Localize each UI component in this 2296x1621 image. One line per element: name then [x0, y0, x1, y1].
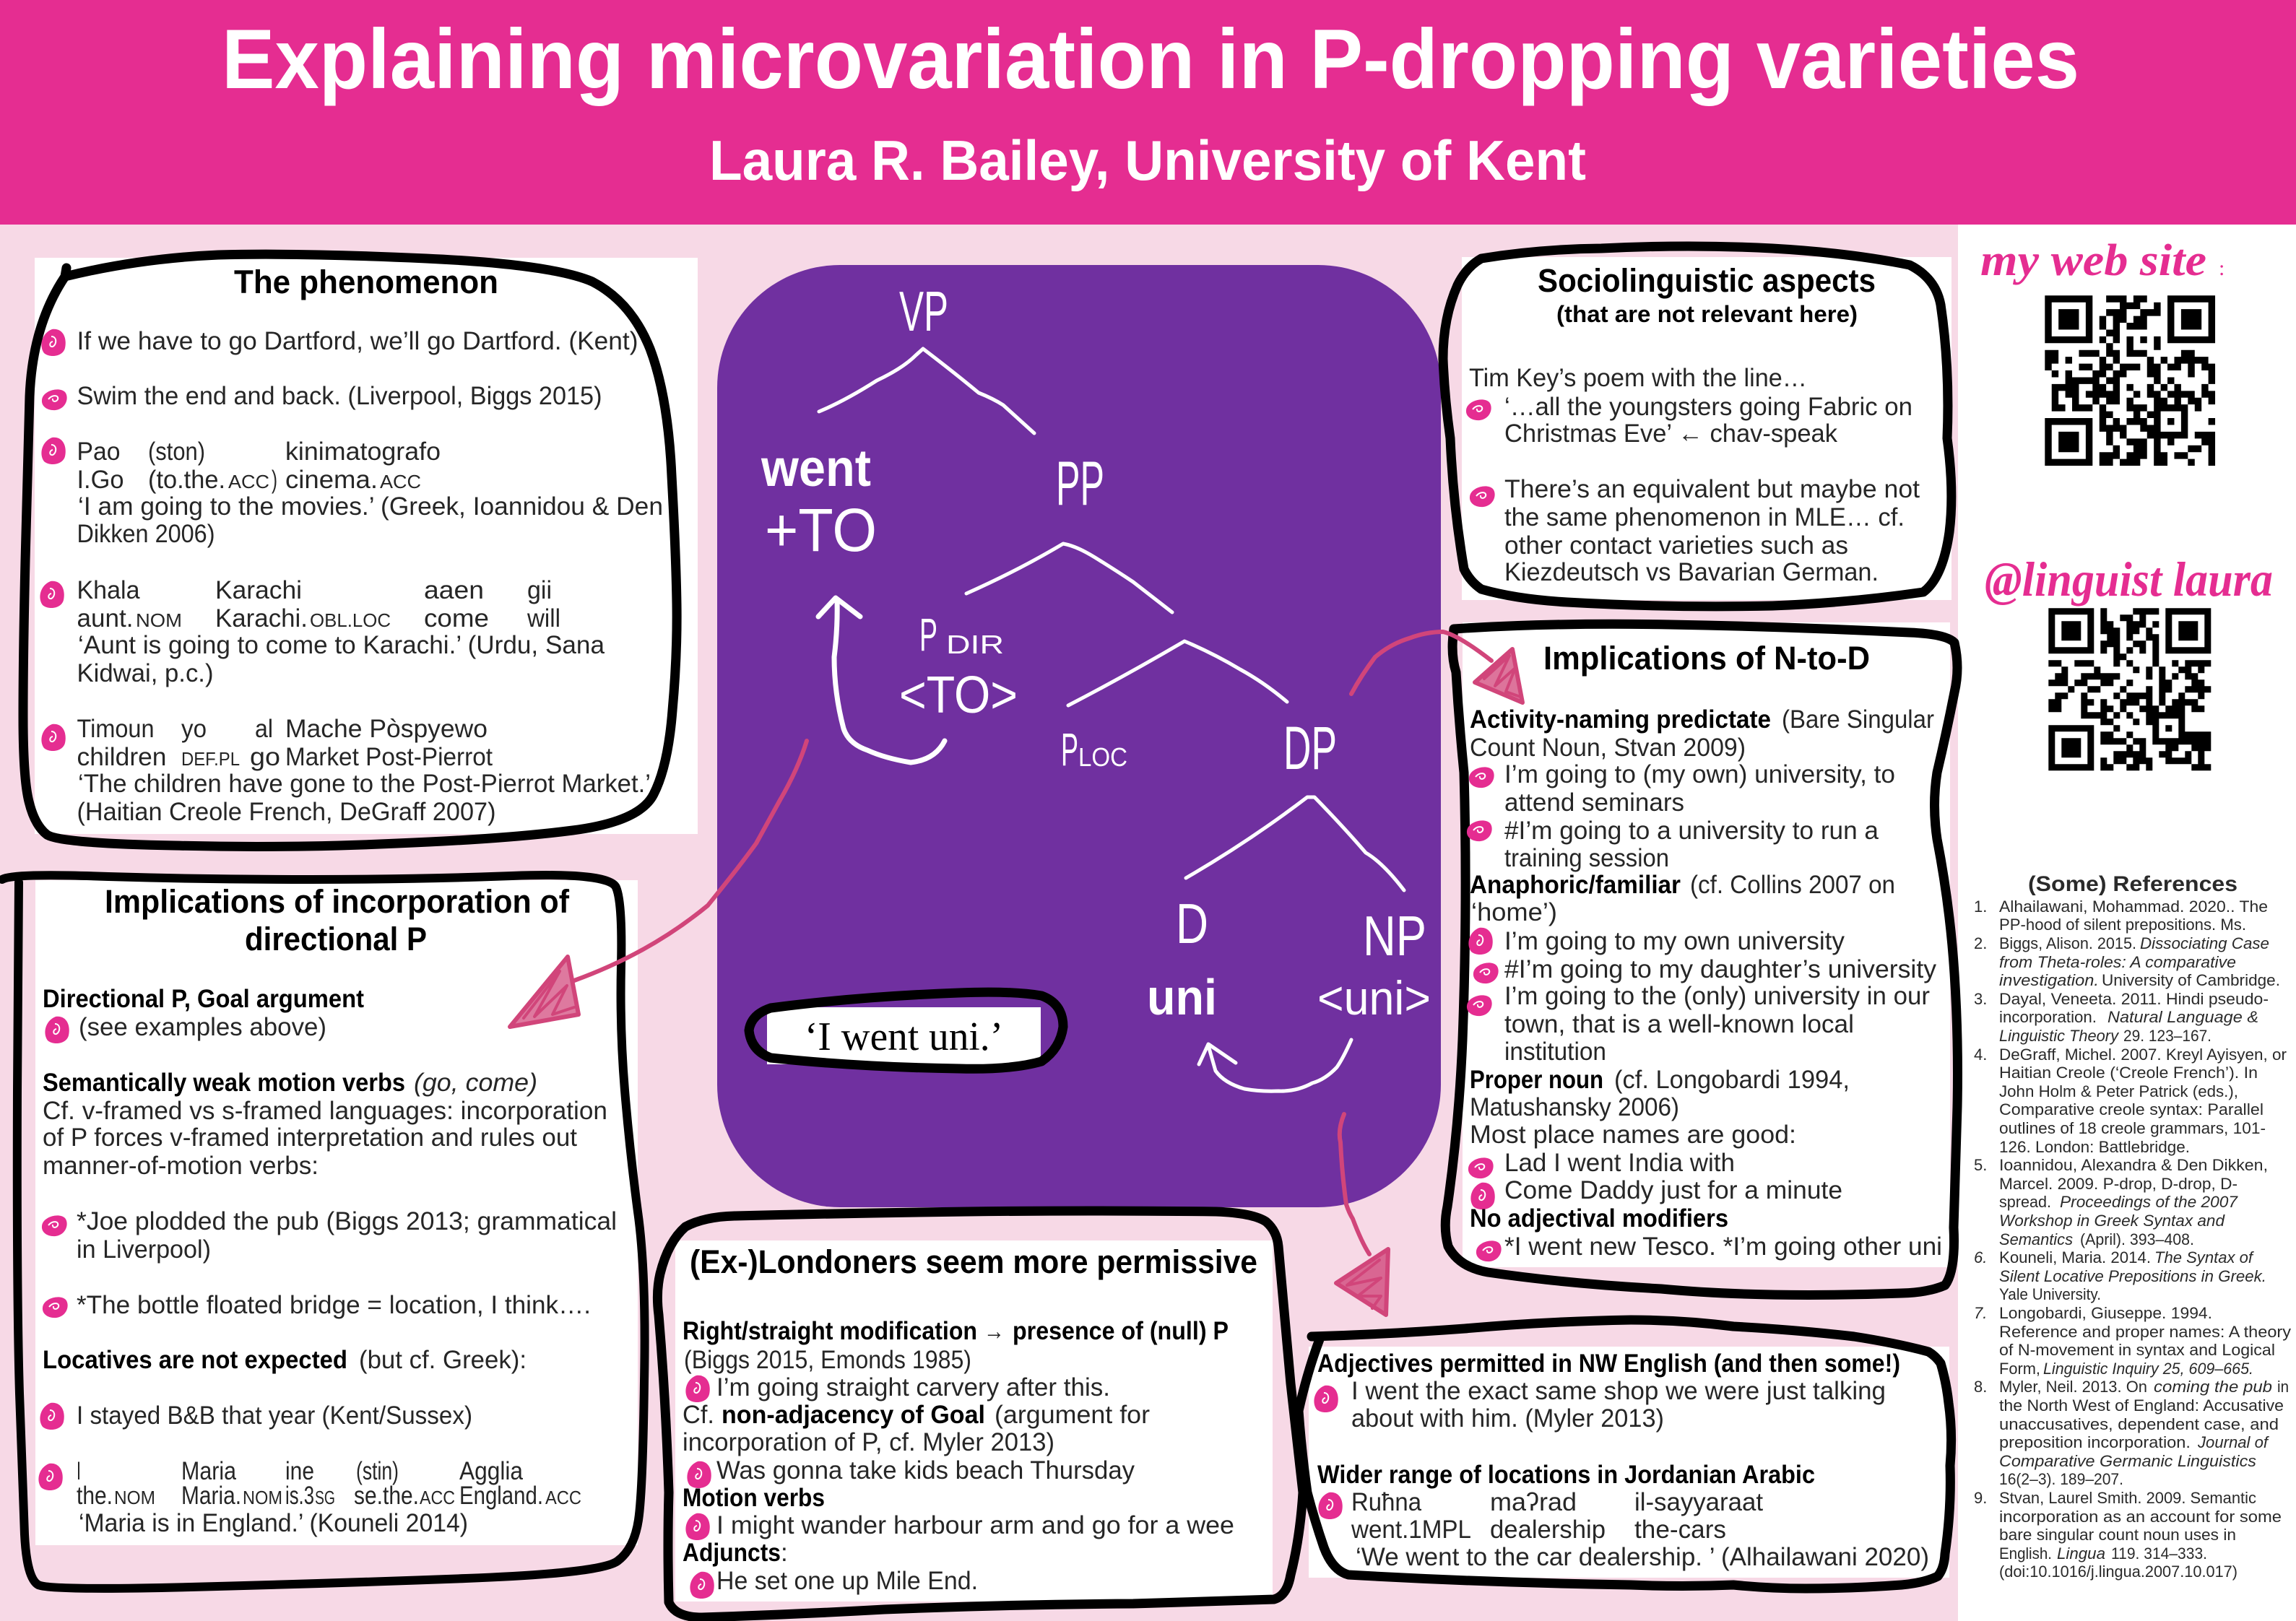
reference 3: 29. 123–167. — [2123, 1027, 2211, 1045]
icon: bullet — [685, 1513, 710, 1540]
example: Maria: (stin) — [356, 1457, 399, 1485]
reference 1: Alhailawani, Mohammad. 2020.. The — [1999, 898, 2268, 916]
example: Maria: ACC — [545, 1487, 581, 1508]
example: exact same shop: I went the exact same shop we were just talking — [1351, 1377, 1886, 1405]
example: Urdu: will — [527, 604, 560, 633]
text: MLE — [1504, 475, 1920, 586]
tree labels — [761, 279, 1431, 1025]
reference 7: Form, — [1999, 1360, 2040, 1378]
reference 5: (April). 393–408. — [2080, 1230, 2194, 1248]
example: Urdu: ‘Aunt is going to come to Karachi.’ (Urdu, Sana — [78, 631, 605, 659]
icon: bullet — [687, 1461, 711, 1488]
example: exact same shop: about with him. (Myler 2013) — [1351, 1404, 1664, 1433]
example: Urdu: NOM — [136, 609, 182, 631]
example: Urdu: gii — [527, 576, 552, 604]
example: Maria: se.the. — [354, 1482, 419, 1510]
text: non-adjacency: Cf. — [683, 1401, 714, 1429]
example: own university: attend seminars — [1504, 788, 1684, 817]
example: Greek: ACC — [228, 471, 269, 492]
reference 3: Dayal, Veneeta. 2011. Hindi pseudo- — [1999, 990, 2269, 1008]
section: anaphoric/familiar: Anaphoric/familiar — [1470, 871, 1681, 899]
example: only university: institution — [1504, 1038, 1606, 1066]
section: anaphoric/familiar — [1470, 871, 1895, 926]
reference 8: 8. — [1974, 1378, 1987, 1396]
example: Joe plodded: in Liverpool) — [77, 1235, 211, 1264]
label: @linguistlaura: @linguist laura — [1985, 552, 2273, 607]
heading: Sociolinguistic aspects — [1538, 262, 1876, 299]
reference 8 — [1974, 1378, 2289, 1488]
icon: bullet — [1318, 1492, 1343, 1519]
reference 5: Ioannidou, Alexandra & Den Dikken, — [1999, 1156, 2268, 1174]
icon: bullet — [41, 329, 66, 356]
reference 8: Myler, Neil. 2013. On — [1999, 1378, 2147, 1396]
tree labels: VP — [899, 279, 948, 343]
example: Jordanian Arabic gloss: the-cars — [1634, 1516, 1726, 1544]
text block: semantically weak motion verbs: manner-of-motion verbs: — [43, 1152, 319, 1180]
example: only university: town, that is a well-known local — [1504, 1010, 1854, 1038]
example: Jordanian Arabic gloss — [1351, 1488, 1929, 1571]
author: Laura R. Bailey, University of Kent — [709, 129, 1586, 192]
example: Haitian — [77, 715, 651, 826]
example: Jordanian Arabic gloss: ‘We went to the car dealership. ’ (Alhailawani 2020) — [1356, 1543, 1929, 1571]
example: Maria: ACC — [420, 1487, 455, 1508]
section: right/straight: → — [984, 1317, 1005, 1345]
example: Tesco: *I went new Tesco. *I’m going other uni — [1504, 1233, 1942, 1261]
icon: bullet — [1468, 928, 1493, 955]
reference 6: Silent Locative Prepositions in Greek. — [1999, 1267, 2266, 1285]
tree labels: P — [1061, 723, 1078, 775]
example: Jordanian Arabic gloss: maʔrad — [1490, 1488, 1577, 1516]
icon: bullet — [42, 389, 67, 410]
heading: Implications of N-to-D — [1543, 640, 1870, 677]
example: Maria: Maria — [181, 1457, 236, 1485]
tree labels: uni — [1147, 969, 1217, 1025]
tree labels: D — [1176, 892, 1208, 955]
tree labels: PP — [1056, 449, 1104, 518]
arrow: head movement to went — [818, 598, 945, 762]
example: harbour arm: I might wander harbour arm and go for a wee — [716, 1511, 1234, 1539]
example: Maria: NOM — [243, 1487, 282, 1508]
right white column — [1958, 225, 2296, 1621]
heading: Jordanian Arabic: Wider range of locations in Jordanian Arabic — [1317, 1461, 1815, 1489]
section: no adjectival modifiers: No adjectival modifiers — [1470, 1204, 1728, 1233]
reference 9: 9. — [1974, 1489, 1987, 1507]
reference 2: Dissociating Case — [2140, 934, 2269, 952]
tree labels: LOC — [1078, 742, 1127, 772]
example: Jordanian Arabic gloss: il-sayyaraat — [1634, 1488, 1763, 1516]
subheading: locatives — [43, 1346, 527, 1374]
reference 3 — [1974, 990, 2269, 1045]
example: Greek: ) — [272, 466, 277, 494]
reference 9: bare singular count noun uses in — [1999, 1526, 2236, 1544]
example: Haitian: al — [255, 715, 273, 743]
arrow: tree to adjectives panel — [1336, 1114, 1388, 1315]
text: non-adjacency — [683, 1401, 1150, 1456]
example: India: Lad I went India with — [1504, 1149, 1735, 1177]
icon: bullet — [1314, 1386, 1338, 1412]
example: carvery: I’m going straight carvery after this. — [716, 1373, 1110, 1401]
heading — [105, 883, 570, 957]
section: activity-naming predicate — [1470, 705, 1934, 762]
reference 2 — [1974, 934, 2280, 989]
reference 4 — [1974, 1046, 2287, 1156]
example: Haitian: Market Post-Pierrot — [285, 743, 493, 771]
reference 4: outlines of 18 creole grammars, 101- — [1999, 1119, 2266, 1137]
icon: bullet — [40, 1403, 64, 1430]
tree labels: DIR — [946, 630, 1004, 659]
tree labels: +TO — [765, 496, 877, 564]
example: exact same shop — [1351, 1377, 1886, 1433]
reference 6: The Syntax of — [2154, 1248, 2255, 1266]
reference 1: PP-hood of silent prepositions. Ms. — [1999, 916, 2246, 934]
reference 7: of N-movement in syntax and Logical — [1999, 1341, 2275, 1359]
example: Maria: I — [77, 1457, 81, 1485]
subheading: locatives: Locatives are not expected — [43, 1346, 347, 1374]
example: daughter's: #I’m going to my daughter’s university — [1504, 955, 1937, 983]
section: right/straight: Right/straight modification — [683, 1317, 977, 1345]
example: Urdu: aunt. — [77, 604, 133, 633]
example: Joe plodded: *Joe plodded the pub (Biggs 2013; grammatical — [77, 1207, 617, 1235]
section: activity-naming predicate: Activity-naming predictate — [1470, 705, 1771, 734]
reference 4: 4. — [1974, 1046, 1987, 1064]
section: proper noun: Proper noun — [1470, 1066, 1603, 1094]
reference 5: Semantics — [1999, 1230, 2073, 1248]
reference 1 — [1974, 898, 2268, 934]
reference 5: Proceedings of the 2007 — [2060, 1193, 2238, 1211]
example: training session: training session — [1504, 844, 1669, 872]
reference 2: 2. — [1974, 934, 1987, 952]
example: own university — [1504, 760, 1895, 817]
text block: semantically weak motion verbs — [43, 1069, 607, 1180]
section: right/straight: (Biggs 2015, Emonds 1985) — [684, 1346, 971, 1374]
section: right/straight — [683, 1317, 1229, 1374]
example: Urdu — [77, 576, 605, 687]
example: Urdu: aaen — [424, 576, 484, 604]
reference 3: 3. — [1974, 990, 1987, 1008]
text: non-adjacency: incorporation of P, cf. Myler 2013) — [683, 1428, 1054, 1456]
reference 7: Longobardi, Giuseppe. 1994. — [1999, 1304, 2212, 1322]
heading — [1538, 262, 1876, 327]
reference 9 — [1974, 1489, 2282, 1581]
arrow: tree to N-to-D panel — [1351, 632, 1522, 703]
example: Daddy: Come Daddy just for a minute — [1504, 1176, 1842, 1204]
tree labels: DP — [1283, 714, 1337, 782]
heading: (Ex-)Londoners seem more permissive — [690, 1243, 1257, 1280]
section: motion verbs: Motion verbs — [683, 1484, 825, 1512]
callout: I went uni — [749, 992, 1063, 1069]
example: B&B: I stayed B&B that year (Kent/Sussex) — [77, 1401, 472, 1430]
icon: bullet — [1469, 767, 1494, 788]
example: training session — [1504, 817, 1879, 872]
reference 8: unaccusatives, dependent case, and — [1999, 1415, 2279, 1433]
reference 8: preposition incorporation. — [1999, 1433, 2191, 1451]
icon: bullet — [41, 724, 66, 751]
text block: semantically weak motion verbs: Semantically weak motion verbs — [43, 1069, 405, 1097]
icon: bullet — [1466, 399, 1491, 420]
example: Haitian: Mache Pòspyewo — [285, 715, 488, 743]
section: anaphoric/familiar: (cf. Collins 2007 on — [1690, 871, 1895, 899]
example: Haitian: go — [250, 743, 280, 771]
example: Urdu: Kidwai, p.c.) — [77, 659, 214, 687]
reference 7: Linguistic Inquiry 25, 609–665. — [2043, 1360, 2253, 1378]
panel: references — [1974, 872, 2291, 1581]
reference 9: incorporation as an account for some — [1999, 1508, 2282, 1526]
reference 8: the North West of England: Accusative — [1999, 1396, 2284, 1414]
example: Greek: Pao — [77, 438, 120, 466]
section: right/straight: presence of (null) P — [1013, 1317, 1229, 1345]
example: Urdu: Karachi. — [215, 604, 308, 633]
reference 8: coming the pub — [2154, 1378, 2272, 1396]
reference 8: 16(2–3). 189–207. — [1999, 1470, 2123, 1488]
example: Greek: (ston) — [148, 438, 205, 466]
example: Greek: (to.the. — [148, 466, 225, 494]
reference 6 — [1974, 1248, 2266, 1303]
example: Mile End: He set one up Mile End. — [716, 1567, 978, 1595]
label: my web site: : — [2219, 256, 2224, 280]
reference 7: 7. — [1974, 1304, 1987, 1322]
example: beach: Was gonna take kids beach Thursday — [716, 1456, 1135, 1485]
reference 5 — [1974, 1156, 2268, 1248]
reference 2: Biggs, Alison. 2015. — [1999, 934, 2136, 952]
example: Haitian: yo — [181, 715, 207, 743]
example: Maria: SG — [315, 1487, 335, 1508]
text: non-adjacency: (argument for — [995, 1401, 1150, 1429]
reference 5: 5. — [1974, 1156, 1987, 1174]
subheading: locatives: (but cf. Greek): — [359, 1346, 527, 1374]
arrow: tree to incorporation panel — [510, 741, 807, 1027]
heading: The phenomenon — [234, 264, 498, 300]
note: see above: (see examples above) — [79, 1013, 326, 1041]
reference 6: 6. — [1974, 1248, 1987, 1266]
heading: (that are not relevant here) — [1556, 301, 1858, 327]
example: Maria: ‘Maria is in England.’ (Kouneli 2014) — [79, 1509, 468, 1537]
reference 3: Natural Language & — [2107, 1008, 2258, 1026]
tree labels: <TO> — [899, 666, 1018, 724]
tree labels: <uni> — [1317, 971, 1431, 1025]
example: Urdu: OBL.LOC — [310, 609, 391, 631]
subheading: directional P: Directional P, Goal argument — [43, 985, 364, 1013]
reference 9: 119. 314–333. — [2111, 1544, 2207, 1563]
text: MLE: other contact varieties such as — [1504, 531, 1848, 560]
reference 1: 1. — [1974, 898, 1987, 916]
tree branches — [819, 349, 1404, 890]
reference 3: incorporation. — [1999, 1008, 2097, 1026]
panel: the phenomenon — [23, 254, 698, 846]
example: Haitian: ‘The children have gone to the Post-Pierrot Market.’ — [78, 770, 651, 798]
reference 7: Reference and proper names: A theory — [1999, 1323, 2291, 1341]
example: Maria: is.3 — [285, 1482, 314, 1510]
section: activity-naming predicate: Count Noun, Stvan 2009) — [1470, 734, 1746, 762]
section: activity-naming predicate: (Bare Singular — [1782, 705, 1934, 734]
section: adjuncts: Adjuncts — [683, 1539, 781, 1567]
text block: semantically weak motion verbs: Cf. v-framed vs s-framed languages: incorporation — [43, 1097, 607, 1125]
icon: bullet — [38, 1464, 63, 1490]
icon: bullet — [1470, 486, 1495, 507]
reference 4: DeGraff, Michel. 2007. Kreyl Ayisyen, or — [1999, 1046, 2287, 1064]
icon: bullet — [690, 1572, 714, 1599]
example: Urdu: come — [424, 604, 489, 633]
reference 6: Yale University. — [1999, 1285, 2101, 1303]
icon: bullet — [1467, 995, 1492, 1016]
text: MLE: the same phenomenon in MLE… cf. — [1504, 503, 1905, 531]
example: Haitian: children — [77, 743, 166, 771]
section: proper noun — [1470, 1066, 1850, 1149]
example: Maria: Agglia — [459, 1457, 523, 1485]
example: Greek: cinema. — [285, 466, 378, 494]
icon: bullet — [1470, 1183, 1495, 1209]
heading: NW English: Adjectives permitted in NW English (and then some!) — [1317, 1350, 1900, 1378]
QR code: web site — [2045, 295, 2215, 466]
example: Urdu: Khala — [77, 576, 140, 604]
section: proper noun: Matushansky 2006) — [1470, 1093, 1679, 1121]
section: anaphoric/familiar: ‘home’) — [1471, 898, 1557, 926]
example: bottle: *The bottle floated bridge = location, I think…. — [77, 1291, 591, 1319]
example: Haitian: (Haitian Creole French, DeGraff 2007) — [77, 798, 495, 826]
example: Greek — [77, 438, 663, 548]
reference 4: John Holm & Peter Patrick (eds.), — [1999, 1082, 2238, 1100]
reference 9: Lingua — [2057, 1544, 2105, 1563]
example: Maria: Maria. — [181, 1482, 241, 1510]
heading: directional P — [245, 921, 427, 957]
text: Tim Key: Tim Key’s poem with the line… — [1469, 364, 1807, 392]
QR code: twitter — [2048, 608, 2211, 770]
panel: implications of N-to-D — [1445, 622, 1957, 1295]
text block: semantically weak motion verbs: of P forces v-framed interpretation and rules out — [43, 1124, 577, 1152]
reference 9: English. — [1999, 1544, 2052, 1563]
label: my web site: my web site — [1980, 236, 2206, 285]
reference 9: (doi:10.1016/j.lingua.2007.10.017) — [1999, 1563, 2237, 1581]
example: Greek: kinimatografo — [285, 438, 441, 466]
panel: adjectives permitted — [1299, 1320, 1951, 1589]
heading: Implications of incorporation of — [105, 883, 570, 920]
reference 9: Stvan, Laurel Smith. 2009. Semantic — [1999, 1489, 2256, 1507]
icon: bullet — [40, 581, 64, 608]
icon: bullet — [1473, 962, 1499, 983]
section: proper noun: Most place names are good: — [1470, 1121, 1796, 1149]
tree labels: NP — [1363, 904, 1426, 968]
reference 6: Kouneli, Maria. 2014. — [1999, 1248, 2151, 1266]
icon: bullet — [1468, 1157, 1494, 1178]
example: only university — [1504, 982, 1930, 1066]
example: Maria: NOM — [114, 1487, 155, 1508]
reference 4: Haitian Creole (‘Creole French’). In — [1999, 1064, 2258, 1082]
reference 8: in — [2277, 1378, 2289, 1396]
heading: (Some) References — [2028, 872, 2237, 896]
reference 5: Marcel. 2009. P-drop, D-drop, D- — [1999, 1175, 2237, 1193]
icon: bullet — [1476, 1240, 1502, 1261]
example: Maria: ine — [285, 1457, 314, 1485]
icon: bullet — [45, 1017, 69, 1043]
example: training session: #I’m going to a university to run a — [1504, 817, 1879, 845]
quote: Fabric: ‘…all the youngsters going Fabric on — [1504, 393, 1912, 421]
example: Haitian: Timoun — [77, 715, 155, 743]
icon: bullet — [685, 1376, 710, 1402]
example: Maria: England. — [459, 1482, 543, 1510]
example: Maria: the. — [77, 1482, 113, 1510]
panel: (Ex-)Londoners — [657, 1211, 1303, 1617]
example: Greek: I.Go — [77, 466, 124, 494]
text: non-adjacency: non-adjacency of Goal — [722, 1401, 985, 1429]
reference 3: Linguistic Theory — [1999, 1027, 2120, 1045]
example: Greek: ACC — [380, 471, 421, 492]
example: my own: I’m going to my own university — [1504, 927, 1845, 955]
example: Jordanian Arabic gloss: dealership — [1490, 1516, 1606, 1544]
reference 5: Workshop in Greek Syntax and — [1999, 1212, 2225, 1230]
section: adjuncts: : — [781, 1539, 788, 1567]
icon: bullet — [1467, 820, 1492, 841]
reference 4: 126. London: Battlebridge. — [1999, 1138, 2190, 1156]
reference 4: Comparative creole syntax: Parallel — [1999, 1100, 2263, 1118]
example: Greek: Dikken 2006) — [77, 520, 215, 548]
quote: Fabric — [1504, 393, 1912, 448]
example: swim: Swim the end and back. (Liverpool, Biggs 2015) — [77, 382, 602, 410]
tree labels: went — [761, 440, 871, 497]
reference 2: investigation. — [1999, 971, 2099, 989]
tree labels: P — [919, 609, 937, 661]
example: Jordanian Arabic gloss: Ruħna — [1351, 1488, 1421, 1516]
text block: semantically weak motion verbs: (go, come) — [414, 1069, 537, 1097]
reference 8: Journal of — [2197, 1433, 2270, 1451]
example: Jordanian Arabic gloss: went.1MPL — [1351, 1516, 1471, 1544]
example: Greek: ‘I am going to the movies.’ (Greek, Ioannidou & Den — [78, 492, 663, 521]
reference 5: spread. — [1999, 1193, 2051, 1211]
reference 2: University of Cambridge. — [2102, 971, 2280, 989]
reference 7 — [1974, 1304, 2291, 1378]
example: Joe plodded — [77, 1207, 617, 1264]
arrow: N-to-D movement — [1199, 1040, 1351, 1091]
example: own university: I’m going to (my own) university, to — [1504, 760, 1895, 788]
example: only university: I’m going to the (only) university in our — [1504, 982, 1930, 1010]
section: proper noun: (cf. Longobardi 1994, — [1614, 1066, 1850, 1094]
quote: Fabric: Christmas Eve’ ← chav-speak — [1504, 420, 1837, 448]
text: MLE: Kiezdeutsch vs Bavarian German. — [1504, 558, 1879, 586]
title: Explaining microvariation in P-dropping varieties — [222, 12, 2079, 106]
header banner — [0, 0, 2296, 225]
example: Haitian: DEF.PL — [181, 748, 240, 770]
reference 2: from Theta-roles: A comparative — [1999, 953, 2236, 971]
panel: syntax tree — [717, 265, 1441, 1207]
text: MLE: There’s an equivalent but maybe not — [1504, 475, 1920, 503]
example: Dartford: If we have to go Dartford, we’ll go Dartford. (Kent) — [77, 327, 638, 355]
icon: bullet — [42, 1215, 67, 1236]
panel: sociolinguistic aspects — [1443, 246, 1951, 607]
icon: bullet — [41, 438, 66, 464]
reference 8: Comparative Germanic Linguistics — [1999, 1452, 2256, 1470]
callout: I went uni: ‘I went uni.’ — [805, 1014, 1003, 1059]
example: Maria — [77, 1457, 581, 1537]
panel: implications of incorporation of directional P — [2, 875, 645, 1589]
example: Urdu: Karachi — [215, 576, 302, 604]
icon: bullet — [43, 1297, 68, 1318]
